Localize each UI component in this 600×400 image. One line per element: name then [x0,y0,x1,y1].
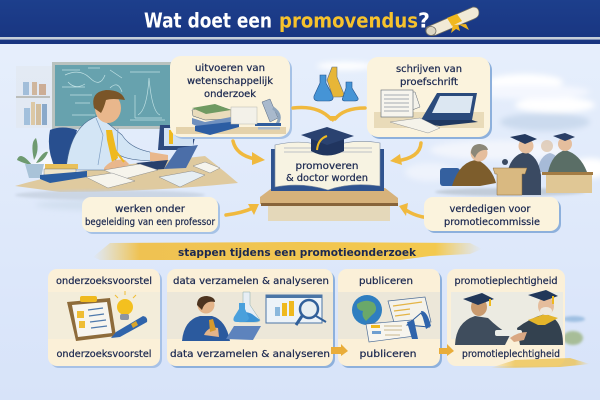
blackboard [52,62,171,129]
panel: werken onder begeleiding van een professor: begeleiding van een professor [85,217,215,228]
arrow: step 3 to step 4 [439,344,454,356]
section banner: stappen tijdens een promotieonderzoek [178,246,417,259]
icon: flasks [233,292,260,322]
icon: magnifier [296,300,326,325]
step panel: promotieplechtigheid: promotieplechtigheid [454,276,558,287]
professor [517,290,563,345]
desk [260,188,398,221]
icon: graduation cap [301,127,354,156]
chair [49,128,77,172]
panel: uitvoeren van wetenschappelijk onderzoek: wetenschappelijk [187,76,274,87]
panel: werken onder begeleiding van een professor [82,197,220,234]
panel: werken onder begeleiding van een professor: werken onder [115,204,185,215]
panel: verdedigen voor promotiecommissie: verdedigen voor [450,204,531,215]
icon: megaphone [407,311,431,339]
committee member left [440,144,496,186]
icon: microscope [255,99,281,130]
arrows toward central book [226,107,434,218]
step panel: publiceren: publiceren [359,276,413,287]
open book: & doctor worden [286,173,368,184]
section banner [93,242,482,260]
panel: uitvoeren van wetenschappelijk onderzoek: uitvoeren van [195,63,265,74]
arrowheads [248,116,408,216]
panel: schrijven van proefschrift [367,57,492,139]
papers [86,162,220,188]
step panel: data verzamelen & analyseren: data verzamelen & analyseren [173,276,329,287]
person: researcher [66,90,168,170]
icon: globe [352,295,382,325]
step panel: publiceren [338,269,442,368]
step panel: publiceren: publiceren [360,349,416,360]
plant [17,138,48,178]
icon: light bulb [115,291,136,320]
laptop pair [136,125,198,170]
panel: schrijven van proefschrift: schrijven van [396,64,462,75]
icon: pen [111,316,147,338]
person with tablet [182,296,261,341]
step panel: promotieplechtigheid: promotieplechtigheid [462,349,560,360]
panel: verdedigen voor promotiecommissie [424,197,561,233]
panel: defence scene [435,133,593,196]
icon: bar chart screen [266,295,322,323]
step panel: data verzamelen & analyseren [167,269,335,368]
scenery behind step 4: bushes [563,316,585,345]
step panel: promotieplechtigheid [447,269,590,368]
background clouds [30,62,600,211]
icon: laptop [390,93,478,133]
step panel: onderzoeksvoorstel: onderzoeksvoorstel [56,276,152,287]
panel: central book and desk [260,127,398,221]
panel: uitvoeren van wetenschappelijk onderzoek: onderzoek [204,89,257,100]
icon: lab flasks [314,67,358,101]
panel: verdedigen voor promotiecommissie: promotiecommissie [444,217,540,228]
panel: schrijven van proefschrift: proefschrift [400,77,458,88]
step panel: onderzoeksvoorstel [48,269,162,368]
header bar [0,0,600,44]
committee right [537,133,593,193]
header bar: promovendus [279,8,418,32]
diploma [495,330,527,342]
icon: documents [381,90,420,117]
bookshelf [16,66,52,128]
step panel: data verzamelen & analyseren: data verzamelen & analyseren [170,349,330,360]
icon: diploma scroll [426,7,479,36]
title: Wat doet een [144,8,272,32]
desk [15,156,238,192]
header bar: ? [418,8,430,32]
defender at lectern [508,134,541,195]
books on desk [40,164,87,183]
open book: promoveren [296,161,358,172]
icon: clipboard [67,296,116,341]
arrow: step 2 to step 3 [331,344,348,356]
lectern [493,168,527,195]
icon: stacked books [192,104,239,135]
open book [271,141,384,191]
panel: uitvoeren van wetenschappelijk onderzoek [170,56,292,139]
step panel: onderzoeksvoorstel: onderzoeksvoorstel [56,349,152,360]
panel: left researcher scene [15,62,238,200]
graduate [455,293,510,345]
icon: article sheets [366,297,431,342]
